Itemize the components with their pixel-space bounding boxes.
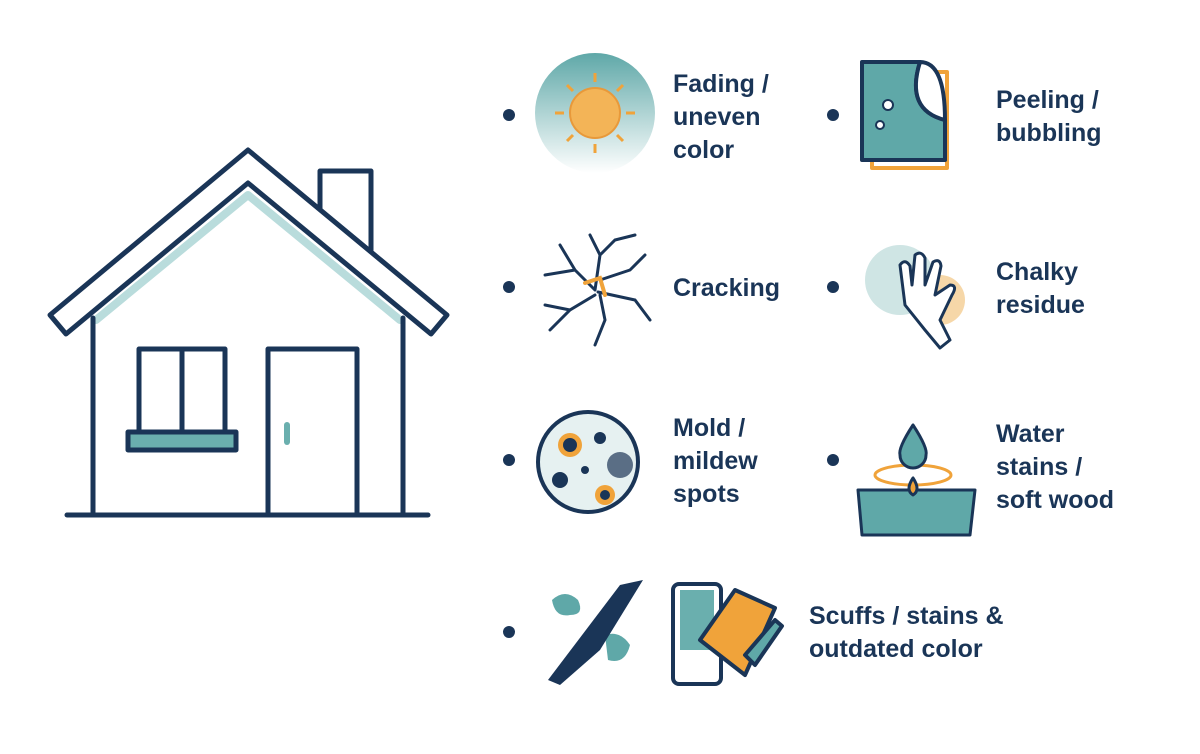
text: water: soft wood — [996, 486, 1114, 514]
text: cracking: Cracking — [673, 274, 780, 302]
icon: peeling — [862, 62, 947, 168]
icon: water stain — [858, 425, 975, 535]
house illustration — [50, 150, 447, 515]
text: mold: spots — [673, 480, 740, 508]
icon: swatch and brush — [673, 584, 782, 684]
text: peeling: bubbling — [996, 119, 1102, 147]
icon: sun fading — [535, 53, 655, 173]
text: water: Water — [996, 420, 1065, 448]
text: fading: Fading / — [673, 70, 769, 98]
icon: scuffs — [548, 580, 643, 685]
bullets — [503, 109, 839, 638]
icon: cracking — [545, 235, 650, 345]
text: chalky: residue — [996, 291, 1085, 319]
text: fading: color — [673, 136, 734, 164]
text: chalky: Chalky — [996, 258, 1078, 286]
text: peeling: Peeling / — [996, 86, 1099, 114]
text: fading: uneven — [673, 103, 761, 131]
text: mold: Mold / — [673, 414, 745, 442]
text: scuffs: Scuffs / stains & — [809, 602, 1004, 630]
text: water: stains / — [996, 453, 1082, 481]
icon: mold — [538, 412, 638, 512]
icon: chalky hand — [865, 245, 965, 348]
text: mold: mildew — [673, 447, 758, 475]
text: scuffs: outdated color — [809, 635, 983, 663]
